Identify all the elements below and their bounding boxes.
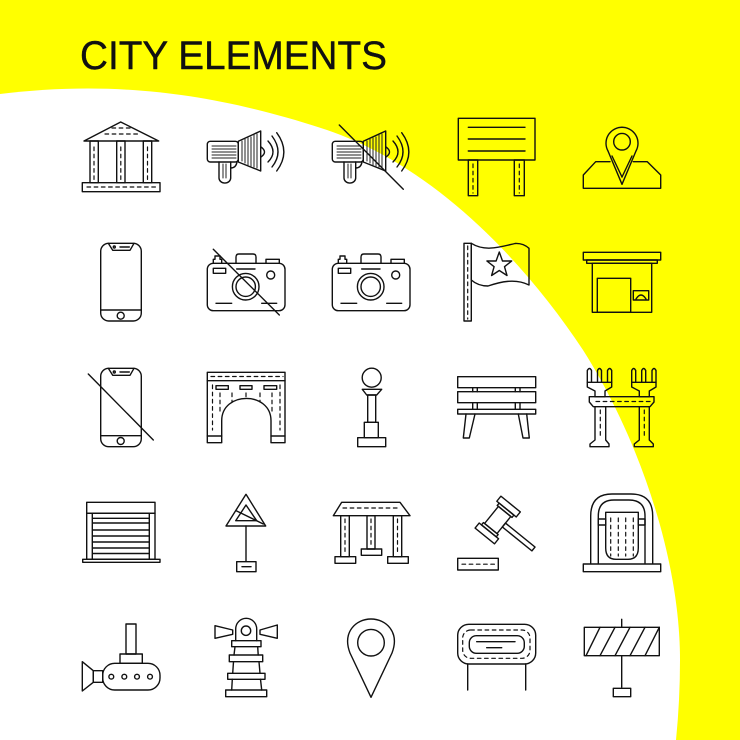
- icon: security camera: [82, 624, 160, 691]
- icon: tower bridge gate: [587, 368, 656, 447]
- icon: triangle road sign: [226, 494, 266, 572]
- icon: billboard: [458, 118, 535, 196]
- icon: judge gavel: [458, 496, 546, 570]
- icon: garage shutter: [83, 502, 160, 562]
- icon: flag with star: [464, 243, 529, 321]
- icon: location pin: [348, 619, 394, 697]
- icon: kiosk shop: [583, 252, 661, 312]
- icon: smartphone: [101, 243, 141, 321]
- icon: map location pin: [583, 127, 661, 188]
- icon: crossed smartphone: [88, 368, 153, 447]
- icon: crossed camera: [207, 249, 285, 315]
- icon: street lamp: [358, 368, 386, 447]
- icon: bank building: [82, 122, 160, 192]
- icon: park bench: [458, 377, 536, 438]
- icon: arch bridge: [207, 372, 285, 443]
- icon: muted megaphone: [332, 125, 409, 189]
- icon: rounded sign board: [458, 624, 536, 690]
- icon: camera: [332, 254, 410, 311]
- icon: arched kiosk: [583, 494, 661, 572]
- icon: road barrier: [584, 619, 659, 697]
- icon: lighthouse: [215, 618, 277, 697]
- icon: megaphone with sound: [207, 131, 284, 183]
- icon: pavilion: [333, 502, 410, 563]
- title: CITY ELEMENTS: [80, 34, 387, 78]
